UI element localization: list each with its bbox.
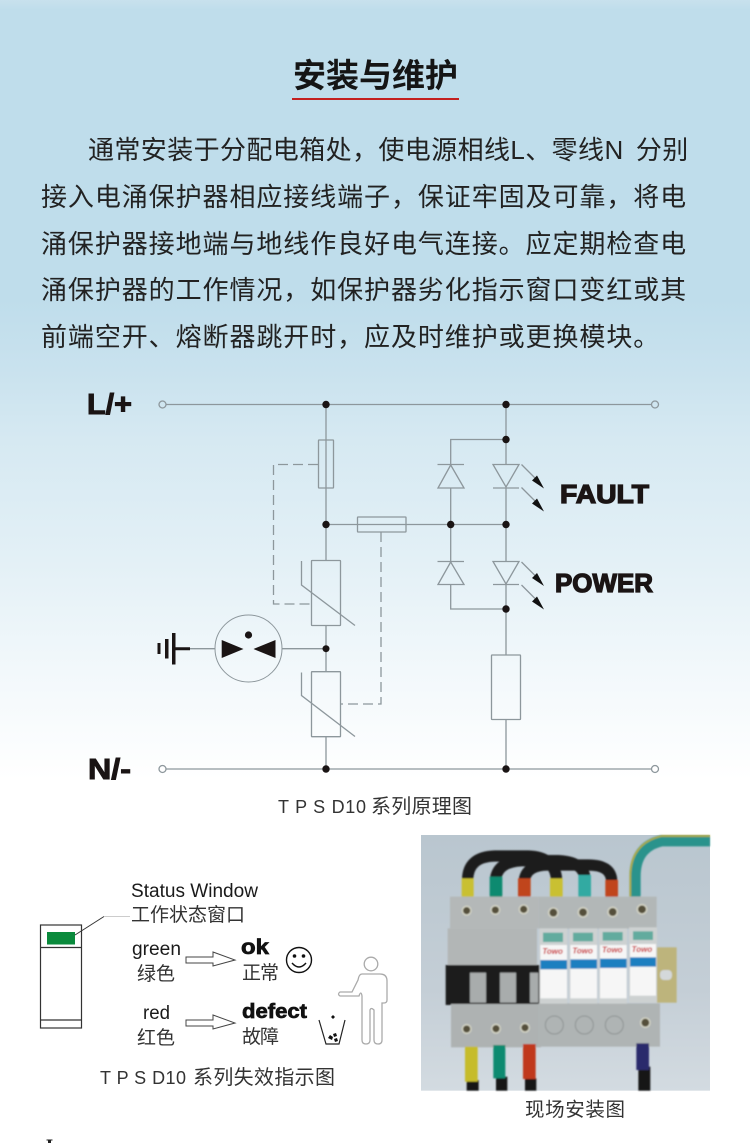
schematic caption: 系列原理图 bbox=[371, 795, 472, 818]
series resistor bbox=[492, 655, 520, 720]
dashed thermal links bbox=[274, 464, 381, 704]
gas discharge tube bbox=[215, 615, 282, 682]
photo: installed modules bbox=[421, 835, 710, 1091]
icon: smiley bbox=[286, 948, 312, 972]
ground symbol bbox=[158, 633, 190, 664]
power rails bbox=[166, 404, 652, 769]
brand marks: Towo bbox=[572, 946, 593, 955]
wire sleeves bbox=[462, 875, 618, 898]
FAULT label: FAULT bbox=[560, 479, 649, 509]
installation text block: 前端空开、熔断器跳开时，应及时维护或更换模块。 bbox=[41, 322, 660, 352]
installation text block bbox=[41, 135, 689, 352]
defect label: defect bbox=[242, 1001, 307, 1023]
schematic caption bbox=[278, 795, 472, 818]
gradient background bbox=[0, 0, 750, 800]
lower wires bbox=[465, 1043, 650, 1091]
status window label bbox=[104, 881, 258, 926]
defect label: 故障 bbox=[242, 1026, 279, 1048]
brand marks: Towo bbox=[602, 946, 623, 955]
terminal screws bbox=[462, 905, 650, 1033]
defect label bbox=[242, 1001, 307, 1048]
status windows bbox=[543, 931, 653, 942]
title: 安装与维护 bbox=[293, 57, 458, 94]
ok label: 正常 bbox=[242, 962, 279, 984]
red state label bbox=[137, 1003, 175, 1049]
icon: person bbox=[338, 957, 387, 1044]
breaker body bbox=[446, 897, 541, 1047]
status caption bbox=[100, 1066, 335, 1089]
diodes bbox=[438, 464, 464, 584]
module blue bands bbox=[540, 957, 656, 969]
earth wire bbox=[635, 841, 710, 897]
black jumper wires bbox=[468, 856, 612, 882]
L/+ label: L/+ bbox=[87, 389, 132, 421]
icon: bin bbox=[319, 1015, 345, 1044]
varistors bbox=[302, 560, 355, 737]
LEDs with light arrows bbox=[493, 464, 544, 610]
status caption: 系列失效指示图 bbox=[193, 1066, 335, 1089]
photo backdrop bbox=[421, 835, 710, 1091]
green state label: 绿色 bbox=[137, 963, 175, 985]
leader line bbox=[75, 916, 104, 935]
status window diagram bbox=[40, 881, 387, 1049]
main branch wiring bbox=[190, 404, 506, 769]
installation text block: 通常安装于分配电箱处，使电源相线L、零线N 分别 bbox=[88, 135, 689, 165]
schematic caption: T P S D10 bbox=[278, 797, 366, 817]
installation text block: 涌保护器的工作情况，如保护器劣化指示窗口变红或其 bbox=[41, 275, 687, 305]
ok label: ok bbox=[241, 936, 269, 959]
module white labels bbox=[540, 944, 656, 998]
installation text block: 涌保护器接地端与地线作良好电气连接。应定期检查电 bbox=[41, 229, 687, 259]
red state label: 红色 bbox=[137, 1027, 175, 1049]
status window label: 工作状态窗口 bbox=[131, 904, 245, 926]
green status window bbox=[47, 932, 75, 944]
POWER label: POWER bbox=[555, 568, 653, 598]
brand marks: Towo bbox=[542, 947, 563, 956]
arrows bbox=[186, 952, 235, 1029]
installation text block: 接入电涌保护器相应接线端子，保证牢固及可靠，将电 bbox=[41, 182, 687, 212]
module round marks bbox=[545, 1016, 623, 1034]
red state label: red bbox=[143, 1003, 170, 1024]
brand marks: Towo bbox=[632, 945, 652, 954]
brand marks bbox=[542, 945, 652, 956]
fuses bbox=[318, 440, 406, 532]
module outline bbox=[40, 925, 82, 1028]
DIN rail bbox=[657, 947, 677, 1003]
schematic diagram bbox=[87, 389, 658, 786]
surge module bodies bbox=[538, 897, 660, 1047]
bottom edge mark bbox=[46, 1140, 52, 1143]
ok label bbox=[241, 936, 279, 984]
photo caption: 现场安装图 bbox=[525, 1099, 625, 1121]
status window label: Status Window bbox=[131, 881, 258, 902]
N/- label: N/- bbox=[88, 754, 131, 786]
green state label: green bbox=[132, 939, 181, 960]
rail terminals bbox=[159, 401, 658, 772]
junction dots bbox=[322, 401, 510, 773]
green state label bbox=[132, 939, 181, 985]
status caption: T P S D10 bbox=[100, 1068, 186, 1088]
